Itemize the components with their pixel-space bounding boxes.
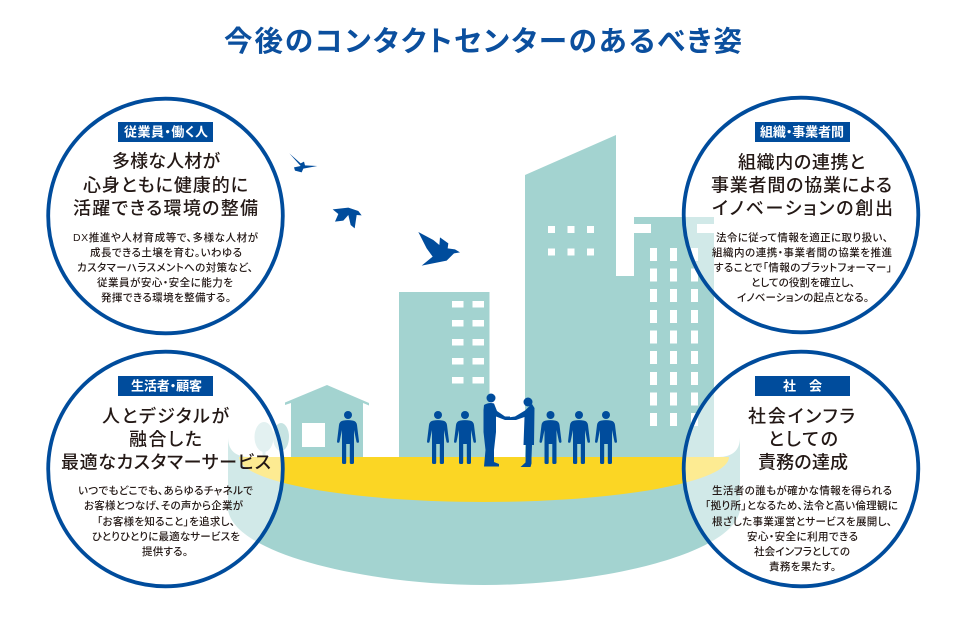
label: 社 会	[783, 379, 822, 394]
body text: 根ざした事業運営とサービスを展開し、	[712, 515, 892, 528]
heading: 最適なカスタマーサービス	[61, 452, 271, 472]
body text: 提供する。	[142, 545, 188, 558]
body text	[712, 231, 892, 304]
label	[755, 122, 850, 142]
heading: 責務の達成	[758, 452, 848, 472]
body text: カスタマーハラスメントへの対策など、	[77, 261, 253, 274]
businessman shaking hands	[484, 394, 510, 466]
bird medium	[333, 208, 362, 228]
businesswoman shaking hands	[508, 398, 534, 467]
body text: お客様とつなげ、その声から企業が	[84, 499, 244, 512]
heading: 社会インフラ	[748, 406, 855, 426]
body text	[705, 484, 898, 573]
heading: イノベーションの創出	[712, 198, 893, 218]
bird large	[418, 232, 460, 266]
body text: いつでもどこでも、あらゆるチャネルで	[78, 485, 253, 497]
body text	[78, 485, 253, 558]
body text: 法令に従って情報を適正に取り扱い、	[716, 231, 888, 244]
trees	[254, 422, 289, 457]
label	[118, 122, 213, 142]
illustration: city and people on a platform	[228, 135, 740, 585]
body text: ひとりひとりに最適なサービスを	[92, 530, 240, 543]
people	[337, 394, 617, 467]
house	[285, 385, 369, 457]
body text: 組織内の連携・事業者間の協業を推進	[712, 246, 892, 259]
label: 従業員・働く人	[124, 125, 208, 140]
building: tall pair	[525, 135, 714, 457]
body text: イノベーションの起点となる。	[737, 291, 869, 304]
label: 組織・事業者間	[760, 125, 844, 140]
body text: 従業員が安心・安全に能力を	[97, 276, 233, 289]
heading	[711, 152, 893, 218]
body text: 生活者の誰もが確かな情報を得られる	[712, 484, 892, 497]
body text: 発揮できる環境を整備する。	[101, 291, 231, 304]
label: 生活者・顧客	[131, 379, 202, 394]
panel: organization	[684, 98, 918, 332]
heading: 活躍できる環境の整備	[73, 198, 258, 218]
heading: としての	[768, 430, 838, 450]
heading: 心身ともに健康的に	[83, 176, 248, 196]
heading	[61, 406, 271, 472]
label	[118, 376, 213, 396]
body text: することで「情報のプラットフォーマー」	[713, 261, 892, 274]
body text: としての役割を確立し、	[751, 276, 855, 289]
body text: 社会インフラとしての	[754, 545, 850, 558]
label	[755, 376, 850, 396]
heading: 人とデジタルが	[102, 406, 229, 426]
body text: 「拠り所」となるため、法令と高い倫理観に	[705, 499, 898, 512]
heading: 融合した	[129, 430, 202, 450]
body text: 安心・安全に利用できる	[747, 530, 858, 543]
body text: DX推進や人材育成等で、多様な人材が	[73, 231, 259, 244]
heading: 組織内の連携と	[738, 152, 865, 172]
body text: 「お客様を知ること」を追求し、	[97, 515, 235, 528]
heading	[73, 150, 258, 218]
body text	[73, 231, 259, 304]
heading: 事業者間の協業による	[711, 176, 892, 196]
birds	[289, 153, 460, 266]
platform base	[228, 437, 740, 585]
title: 今後のコンタクトセンターのあるべき姿	[224, 26, 742, 58]
yellow ground	[239, 457, 729, 502]
body text: 責務を果たす。	[769, 560, 836, 573]
panel: employees	[48, 99, 283, 333]
body text: 成長できる土壌を育む。いわゆる	[90, 246, 242, 259]
building: small	[399, 292, 490, 457]
panel: society	[684, 352, 918, 586]
bird small	[289, 153, 317, 172]
heading: 多様な人材が	[112, 150, 220, 172]
heading	[748, 406, 855, 472]
panel: consumers	[48, 352, 283, 586]
